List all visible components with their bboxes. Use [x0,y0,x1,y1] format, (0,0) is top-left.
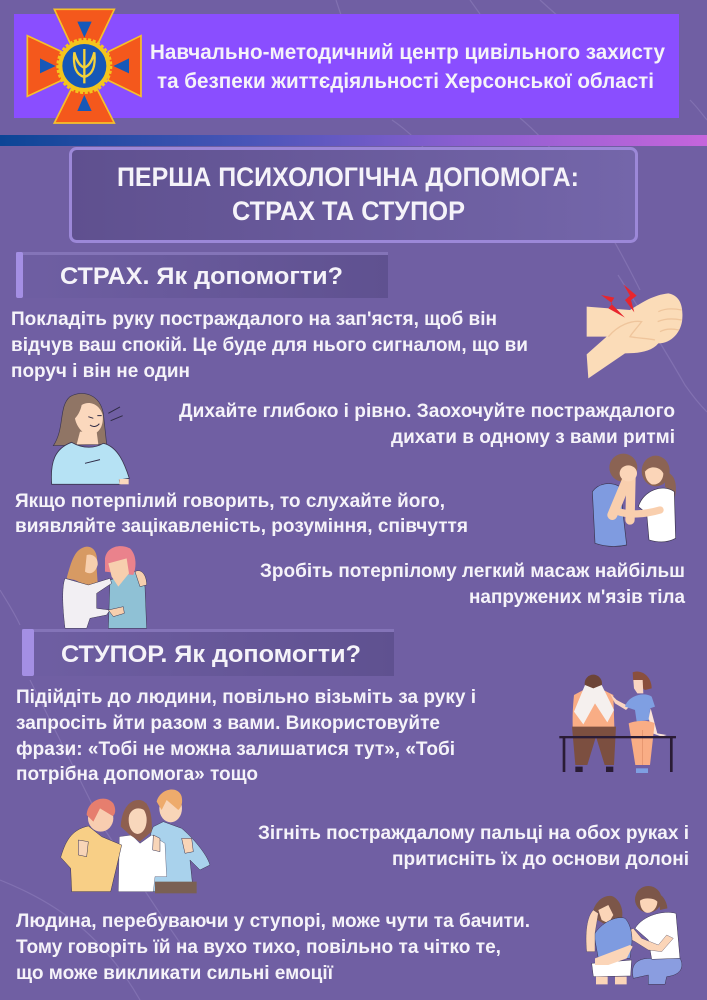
banner background [14,14,679,118]
illustration: couple on bench [559,672,676,773]
heading bar [22,629,394,676]
illustration: two women hugging [63,546,147,628]
tip: light massage: напружених м'язів тіла [469,586,685,608]
illustration: comforting a seated woman [586,886,682,984]
tip: listen: Якщо потерпілий говорить, то слухайте його, [15,490,445,512]
section heading: stupor [22,629,394,676]
decorative stripe [0,135,707,146]
tip: listen [15,490,468,537]
tip: bend fingers: притисніть їх до основи долоні [392,848,689,870]
tip: speak quietly [16,910,530,984]
tip: light massage [260,560,685,608]
tip: take by the hand: фрази: «Тобі не можна залишатися тут», «Тобі [16,738,455,760]
tip: take by the hand: потрібна допомога» тощо [16,763,258,785]
tip: hand on wrist: відчув ваш спокій. Це буде для нього сигналом, що ви [11,334,528,356]
tip: speak quietly: що може викликати сильні емоції [16,962,333,984]
tip: hand on wrist: Покладіть руку постраждалого на зап'ястя, щоб він [11,308,497,330]
main title: ПЕРША ПСИХОЛОГІЧНА ДОПОМОГА: [117,162,579,192]
tip: take by the hand: Підійдіть до людини, повільно візьміть за руку і [16,686,476,708]
main title [117,162,579,226]
title box [70,148,636,242]
organisation name: та безпеки життєдіяльності Херсонської області [157,69,654,93]
tip: hand on wrist: поруч і він не один [11,360,190,382]
icon: civil protection emblem [27,9,141,123]
illustration: comforting a man [592,454,676,547]
tip: breathe evenly: Дихайте глибоко і рівно. Заохочуйте постраждалого [179,400,675,422]
tip: breathe evenly: дихати в одному з вами ритмі [391,426,675,448]
tip: hand on wrist [11,308,528,382]
tip: speak quietly: Тому говоріть їй на вухо тихо, повільно та чітко те, [16,936,501,958]
header banner [14,14,679,118]
heading text: СТУПОР. Як допомогти? [61,641,361,668]
tip: breathe evenly [179,400,675,448]
illustration: three friends [61,790,210,893]
tip: bend fingers [258,822,689,870]
illustration: woman breathing [51,393,129,484]
tip: bend fingers: Зігніть постраждалому пальці на обох руках і [258,822,689,844]
main title: СТРАХ ТА СТУПОР [232,196,465,226]
organisation name: Навчально-методичний центр цивільного захисту [150,40,665,64]
tip: light massage: Зробіть потерпілому легкий масаж найбільш [260,560,685,582]
tip: speak quietly: Людина, перебуваючи у ступорі, може чути та бачити. [16,910,530,932]
heading text: СТРАХ. Як допомогти? [60,263,343,290]
tip: take by the hand [16,686,476,785]
section heading: fear [16,252,388,298]
tip: take by the hand: запросіть йти разом з вами. Використовуйте [16,712,440,734]
icon: wrist hand [587,284,682,378]
organisation name [150,40,665,93]
heading bar [16,252,388,298]
title panel [70,148,636,242]
tip: listen: виявляйте зацікавленість, розуміння, співчуття [15,515,468,537]
